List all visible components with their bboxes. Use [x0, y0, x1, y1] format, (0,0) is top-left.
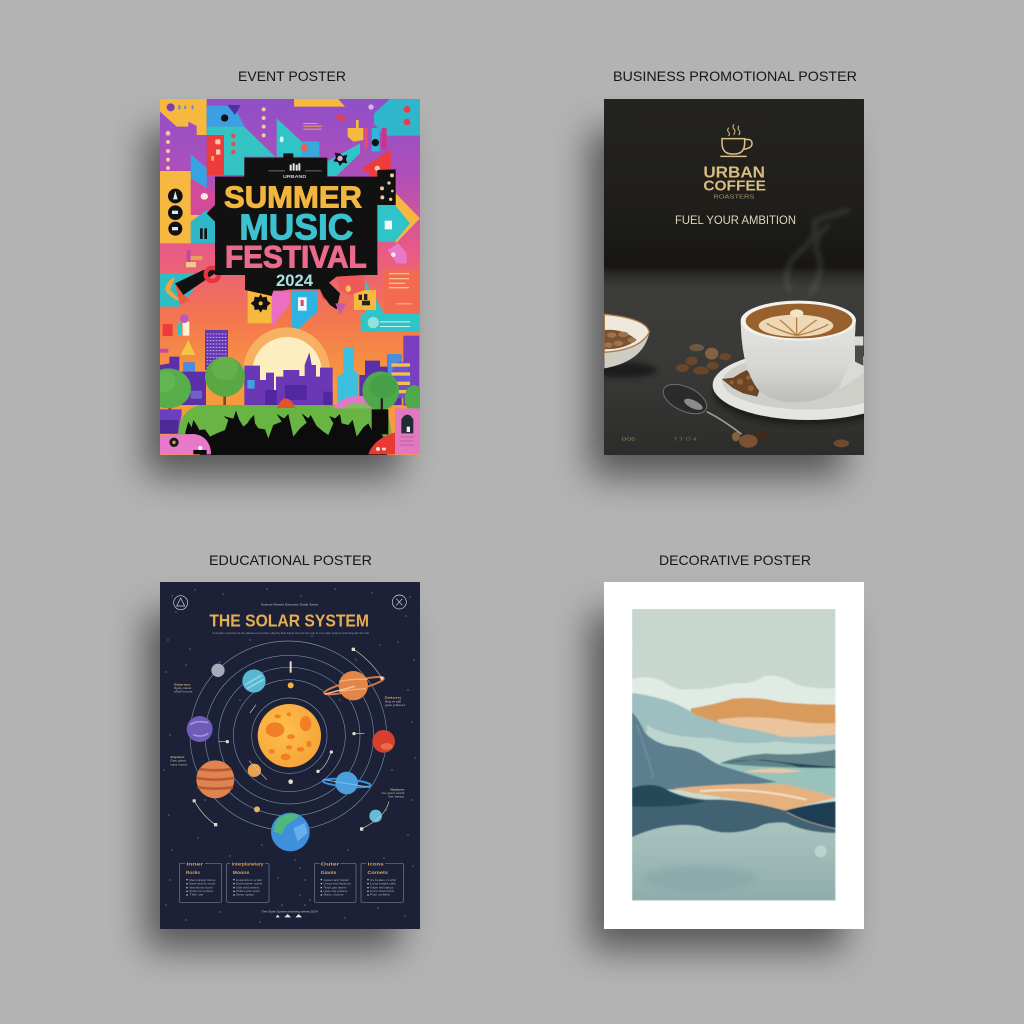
pale teal hill [632, 693, 835, 765]
fact boxes: Probes and rovers [236, 889, 261, 893]
planet callouts: Rocky planet [174, 686, 191, 690]
geometric shapes upper [160, 99, 420, 267]
skyline [160, 356, 195, 372]
brand: roasters: ROASTERS [713, 195, 755, 201]
fact boxes: Icy bodies in orbit [370, 878, 396, 882]
fact boxes: Earth and its moon [189, 882, 216, 886]
clouds [632, 676, 835, 711]
brand: urban: URBAN [703, 164, 765, 181]
orbits [190, 641, 387, 830]
fact boxes: Asteroids in a belt [236, 878, 262, 882]
dark blue mountain [632, 712, 777, 790]
earth [271, 813, 310, 851]
planet callouts: far away [388, 795, 405, 799]
fact boxes: Outer [321, 861, 339, 867]
heading: business promotional poster: BUSINESS PROMOTIONAL POSTER [613, 68, 857, 84]
fact boxes: Thin air [189, 893, 204, 897]
fact boxes: Giants [321, 870, 337, 876]
poster title: THE SOLAR SYSTEM [209, 611, 369, 631]
scattered beans [676, 344, 849, 448]
fact boxes: Rocks [186, 870, 200, 876]
black banner [207, 153, 396, 275]
fact boxes: Kuiper belt objects [370, 885, 394, 889]
fact boxes: Jupiter and Saturn [323, 878, 350, 882]
title: summer: SUMMER [224, 179, 362, 214]
planet callouts: Saturnus [174, 682, 191, 686]
planet callouts: many moons [170, 762, 188, 766]
ground [177, 405, 392, 438]
header text: Science Planets Discovery Guide Series [261, 603, 319, 607]
coffee pile on saucer [722, 370, 760, 397]
heading: educational poster: EDUCATIONAL POSTER [209, 552, 372, 568]
hill and stage [333, 396, 372, 408]
fact boxes: Uranus and Neptune [323, 882, 350, 886]
lower water [632, 823, 835, 900]
subtitle: A simple overview of the planets and other objects that travel around the sun in our solar system and beyond the belt [212, 631, 369, 635]
panel: educational poster [160, 582, 420, 929]
tagline: FUEL YOUR AMBITION [675, 213, 796, 227]
planet callouts: Ice giant world [382, 791, 405, 795]
planets [187, 664, 395, 822]
top emblems [174, 595, 406, 610]
fact boxes: Rocky iron surfaces [189, 889, 214, 893]
panel: business poster [604, 99, 864, 455]
geometric shapes lower and pennants [146, 268, 423, 443]
fact boxes: Icons [368, 861, 384, 867]
steam [787, 210, 850, 295]
sun [244, 327, 330, 390]
planet callouts: Saturn [384, 696, 401, 700]
arrows and probes [194, 649, 389, 829]
heading: decorative poster: DECORATIVE POSTER [659, 552, 811, 568]
sun [258, 704, 321, 767]
fact boxes: Inner [186, 861, 203, 867]
title: music: MUSIC [239, 206, 353, 247]
navy band [632, 785, 835, 837]
title: year: 2024 [276, 272, 314, 290]
planet callouts [170, 682, 405, 799]
brand: coffee: COFFEE [703, 178, 766, 195]
trees [160, 356, 420, 410]
fact boxes: Mercury and Venus [189, 878, 216, 882]
aqua water [720, 763, 835, 798]
star field [164, 589, 415, 922]
heading: event poster: EVENT POSTER [238, 68, 346, 84]
fact boxes: Large ring systems [323, 889, 348, 893]
planet callouts: Neptune [390, 787, 405, 791]
title: festival: FESTIVAL [225, 240, 367, 275]
corner shapes [160, 408, 420, 454]
panel: event poster [146, 99, 423, 455]
orange dune [691, 698, 835, 738]
planet callouts: gas planet [385, 703, 405, 707]
fact boxes [179, 860, 403, 917]
panel: business poster: T T O 4 [673, 437, 698, 442]
fact boxes: Solar wind streams [236, 885, 260, 889]
planet callouts: small moons [174, 690, 193, 694]
footer marks: OOS [622, 437, 636, 443]
spoon [662, 384, 742, 435]
planet callouts: Jupiter [170, 755, 186, 759]
fact boxes: Deep space [236, 893, 255, 897]
fact boxes: Dust between worlds [236, 882, 263, 886]
fact boxes: Long bright tails [370, 882, 397, 886]
poster shadows [146, 130, 844, 949]
fact boxes: Interplanetary [232, 861, 264, 867]
panel: decorative poster [604, 582, 864, 929]
banner label: URBAND [283, 174, 307, 180]
fact boxes: Thick gas layers [323, 885, 347, 889]
bowl of beans [604, 314, 658, 380]
mid dark stripe [720, 750, 835, 770]
landscape artwork [632, 609, 835, 900]
planet callouts: Gas giant [170, 759, 186, 763]
logo: coffee cup [720, 124, 752, 156]
fact boxes: Many moons [323, 893, 344, 897]
fact boxes: Comets [367, 870, 388, 876]
planet callouts: Big rings [385, 699, 402, 703]
crowd silhouette [185, 411, 390, 455]
footer: The Solar System learning series 2024 [262, 909, 318, 913]
fact boxes: Far orbits [370, 893, 391, 897]
fact boxes: Frozen dwarf worlds [370, 889, 395, 893]
cup [741, 301, 863, 402]
fact boxes: Moons [233, 870, 250, 876]
fact boxes: Mars has two moons [189, 885, 213, 889]
sand dune [673, 784, 835, 811]
saucer [711, 356, 864, 428]
